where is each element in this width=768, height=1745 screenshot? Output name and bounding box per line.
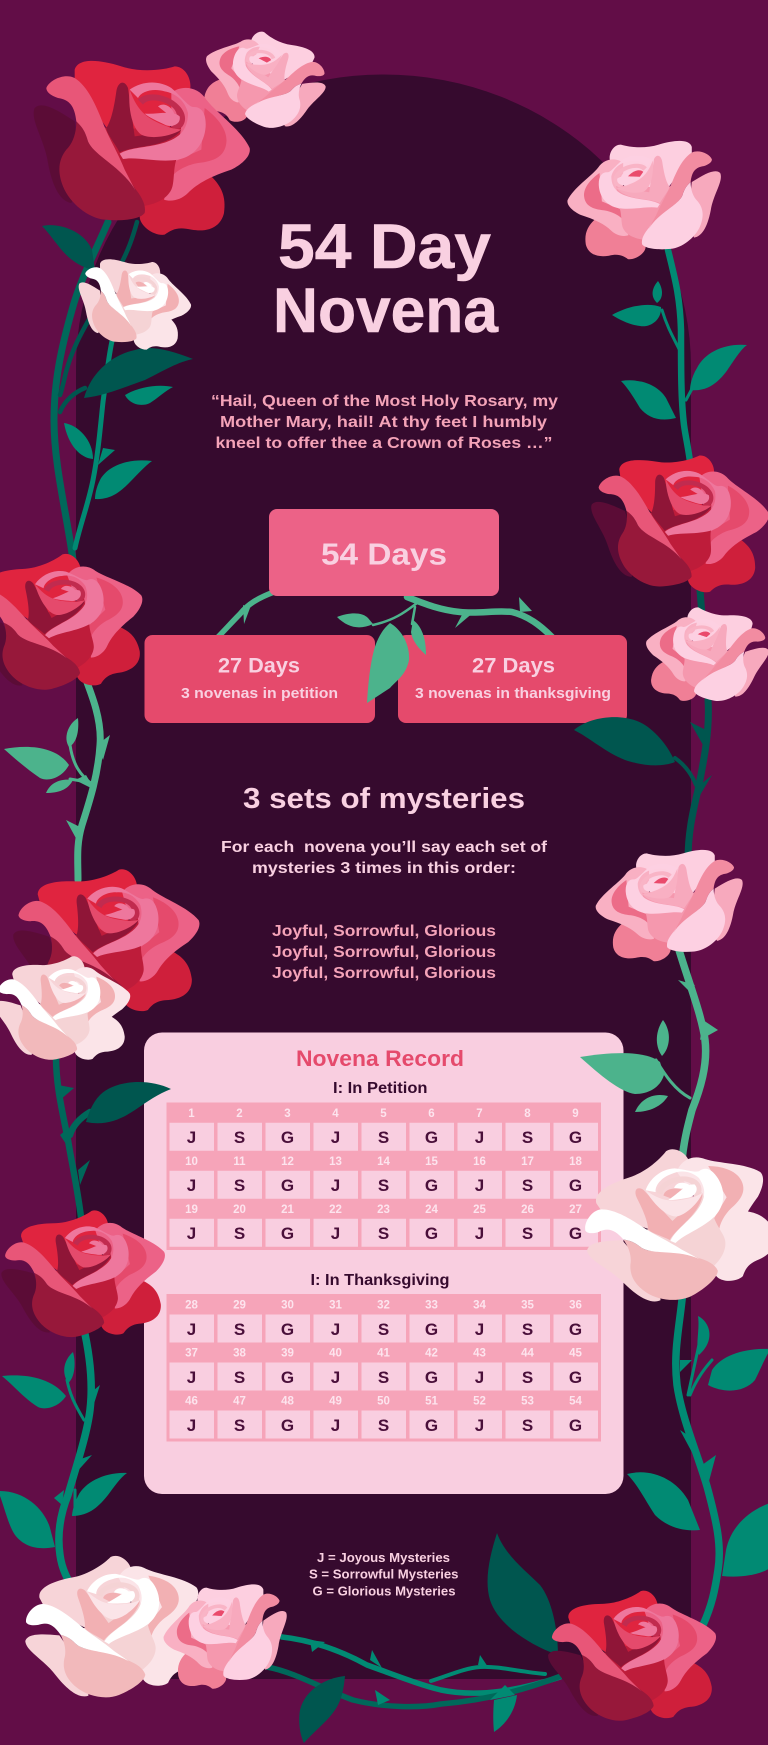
table: thanksgiving days 28 to 54: 35 xyxy=(521,1300,534,1312)
table: thanksgiving days 28 to 54: 41 xyxy=(377,1348,390,1360)
table: petition days 1 to 27: 16 xyxy=(473,1156,486,1168)
rose: red left edge xyxy=(0,530,165,720)
table: petition days 1 to 27: 21 xyxy=(281,1204,294,1216)
table: petition days 1 to 27: 27 xyxy=(569,1204,582,1216)
table: petition days 1 to 27: 5 xyxy=(380,1108,387,1120)
rose: red left middle xyxy=(2,849,218,1039)
rose: small white upper left xyxy=(79,259,191,350)
mystery order list xyxy=(272,923,496,982)
instruction text xyxy=(221,839,548,877)
rose: pink right middle xyxy=(596,850,743,961)
rose: red lower left xyxy=(0,1190,184,1364)
table: thanksgiving days 28 to 54: 45 xyxy=(569,1348,582,1360)
mystery order list: Joyful, Sorrowful, Glorious xyxy=(272,965,496,982)
prayer quote: Mother Mary, hail! At thy feet I humbly xyxy=(220,414,547,431)
table: petition days 1 to 27: 1 xyxy=(188,1108,195,1120)
table: petition days 1 to 27: 8 xyxy=(524,1108,531,1120)
vines joining the day boxes xyxy=(217,592,552,638)
box: 27 days in thanksgiving xyxy=(398,635,627,723)
table: petition days 1 to 27: JSGJSGJSG xyxy=(187,1224,582,1243)
title: 54 Day xyxy=(278,212,491,282)
table: thanksgiving days 28 to 54: 30 xyxy=(281,1300,294,1312)
table: petition days 1 to 27: 6 xyxy=(428,1108,435,1120)
box: 27 days in thanksgiving: 27 Days xyxy=(472,654,555,678)
table: petition days 1 to 27: 2 xyxy=(236,1108,243,1120)
table: thanksgiving days 28 to 54: 49 xyxy=(329,1396,342,1408)
table: thanksgiving days 28 to 54: 46 xyxy=(185,1396,198,1408)
right vines xyxy=(656,250,719,1625)
table: petition days 1 to 27: JSGJSGJSG xyxy=(187,1176,582,1195)
table: thanksgiving days 28 to 54 xyxy=(166,1294,601,1442)
rose: large red top left xyxy=(34,61,250,235)
prayer quote xyxy=(211,393,558,452)
legend: G = Glorious Mysteries xyxy=(312,1584,456,1598)
table: petition days 1 to 27: 23 xyxy=(377,1204,390,1216)
dark arched panel xyxy=(76,75,691,1679)
table: thanksgiving days 28 to 54: 51 xyxy=(425,1396,438,1408)
box: 27 days in petition: 3 novenas in petition xyxy=(181,686,338,702)
leaves: left side xyxy=(0,225,193,1548)
thanksgiving subheading: I: In Thanksgiving xyxy=(310,1272,450,1289)
box: 54 days: 54 Days xyxy=(321,536,447,572)
table: thanksgiving days 28 to 54: 50 xyxy=(377,1396,390,1408)
table: thanksgiving days 28 to 54: 48 xyxy=(281,1396,294,1408)
table: thanksgiving days 28 to 54: 28 xyxy=(185,1300,198,1312)
prayer quote: “Hail, Queen of the Most Holy Rosary, my xyxy=(211,393,558,410)
rose: white left xyxy=(0,941,144,1080)
table: petition days 1 to 27: 14 xyxy=(377,1156,390,1168)
prayer quote: kneel to offer thee a Crown of Roses …” xyxy=(216,435,552,452)
legend xyxy=(309,1551,459,1598)
table: petition days 1 to 27: 11 xyxy=(233,1156,246,1168)
rose: pink bottom xyxy=(164,1584,287,1689)
table: petition days 1 to 27: 20 xyxy=(233,1204,246,1216)
table: petition days 1 to 27: 9 xyxy=(572,1108,579,1120)
table: petition days 1 to 27: 15 xyxy=(425,1156,438,1168)
table: petition days 1 to 27: 24 xyxy=(425,1204,438,1216)
table: petition days 1 to 27: 10 xyxy=(185,1156,198,1168)
box: 54 days xyxy=(269,509,499,596)
table: thanksgiving days 28 to 54: 43 xyxy=(473,1348,486,1360)
instruction text: For each novena you’ll say each set of xyxy=(221,839,548,856)
table: thanksgiving days 28 to 54: 54 xyxy=(569,1396,582,1408)
table: petition days 1 to 27: 7 xyxy=(476,1108,483,1120)
table: thanksgiving days 28 to 54: 32 xyxy=(377,1300,390,1312)
instruction text: mysteries 3 times in this order: xyxy=(252,860,516,877)
table: thanksgiving days 28 to 54: JSGJSGJSG xyxy=(187,1368,582,1387)
table: thanksgiving days 28 to 54: 44 xyxy=(521,1348,534,1360)
table: thanksgiving days 28 to 54: 47 xyxy=(233,1396,246,1408)
table: petition days 1 to 27: JSGJSGJSG xyxy=(187,1128,582,1147)
table: thanksgiving days 28 to 54: 38 xyxy=(233,1348,246,1360)
record heading: Novena Record xyxy=(296,1046,464,1071)
leaves: bottom xyxy=(299,1533,558,1743)
table: petition days 1 to 27: 18 xyxy=(569,1156,582,1168)
table: petition days 1 to 27: 22 xyxy=(329,1204,342,1216)
table: thanksgiving days 28 to 54: JSGJSGJSG xyxy=(187,1320,582,1339)
rose: large white right xyxy=(563,1110,768,1342)
table: thanksgiving days 28 to 54: 52 xyxy=(473,1396,486,1408)
table: thanksgiving days 28 to 54: 31 xyxy=(329,1300,342,1312)
table: thanksgiving days 28 to 54: 34 xyxy=(473,1300,486,1312)
rose: large white bottom left xyxy=(6,1524,230,1733)
table: thanksgiving days 28 to 54: 42 xyxy=(425,1348,438,1360)
leaves: right side xyxy=(574,281,768,1577)
central leaves xyxy=(337,613,426,703)
box: 27 days in petition xyxy=(144,635,375,723)
legend: J = Joyous Mysteries xyxy=(317,1551,450,1565)
table: petition days 1 to 27 xyxy=(166,1102,601,1250)
rose: red bottom right xyxy=(536,1569,736,1745)
table: thanksgiving days 28 to 54: 37 xyxy=(185,1348,198,1360)
table: petition days 1 to 27: 19 xyxy=(185,1204,198,1216)
rose: pink right xyxy=(634,594,768,719)
mystery order list: Joyful, Sorrowful, Glorious xyxy=(272,923,496,940)
table: thanksgiving days 28 to 54: 53 xyxy=(521,1396,534,1408)
title xyxy=(273,212,499,346)
table: petition days 1 to 27: 17 xyxy=(521,1156,534,1168)
heading: 3 sets of mysteries: 3 sets of mysteries xyxy=(243,783,525,815)
table: thanksgiving days 28 to 54: 39 xyxy=(281,1348,294,1360)
table: petition days 1 to 27: 26 xyxy=(521,1204,534,1216)
table: thanksgiving days 28 to 54: JSGJSGJSG xyxy=(187,1416,582,1435)
rose: pink top xyxy=(186,12,337,151)
table: thanksgiving days 28 to 54: 29 xyxy=(233,1300,246,1312)
left vines xyxy=(54,222,137,1590)
table: petition days 1 to 27: 13 xyxy=(329,1156,342,1168)
table: petition days 1 to 27: 4 xyxy=(332,1108,339,1120)
petition subheading: I: In Petition xyxy=(333,1080,428,1097)
table: petition days 1 to 27: 3 xyxy=(284,1108,291,1120)
panel: novena record card xyxy=(144,1032,624,1494)
table: petition days 1 to 27: 12 xyxy=(281,1156,294,1168)
table: thanksgiving days 28 to 54: 40 xyxy=(329,1348,342,1360)
mystery order list: Joyful, Sorrowful, Glorious xyxy=(272,944,496,961)
rose: pink top right xyxy=(567,141,721,259)
legend: S = Sorrowful Mysteries xyxy=(309,1568,459,1582)
box: 27 days in petition: 27 Days xyxy=(218,654,300,678)
title: Novena xyxy=(273,276,499,346)
box: 27 days in thanksgiving: 3 novenas in thanksgiving xyxy=(415,686,611,702)
bottom vines xyxy=(267,1637,561,1707)
table: thanksgiving days 28 to 54: 33 xyxy=(425,1300,438,1312)
table: thanksgiving days 28 to 54: 36 xyxy=(569,1300,582,1312)
table: petition days 1 to 27: 25 xyxy=(473,1204,486,1216)
rose: red right xyxy=(585,443,768,607)
